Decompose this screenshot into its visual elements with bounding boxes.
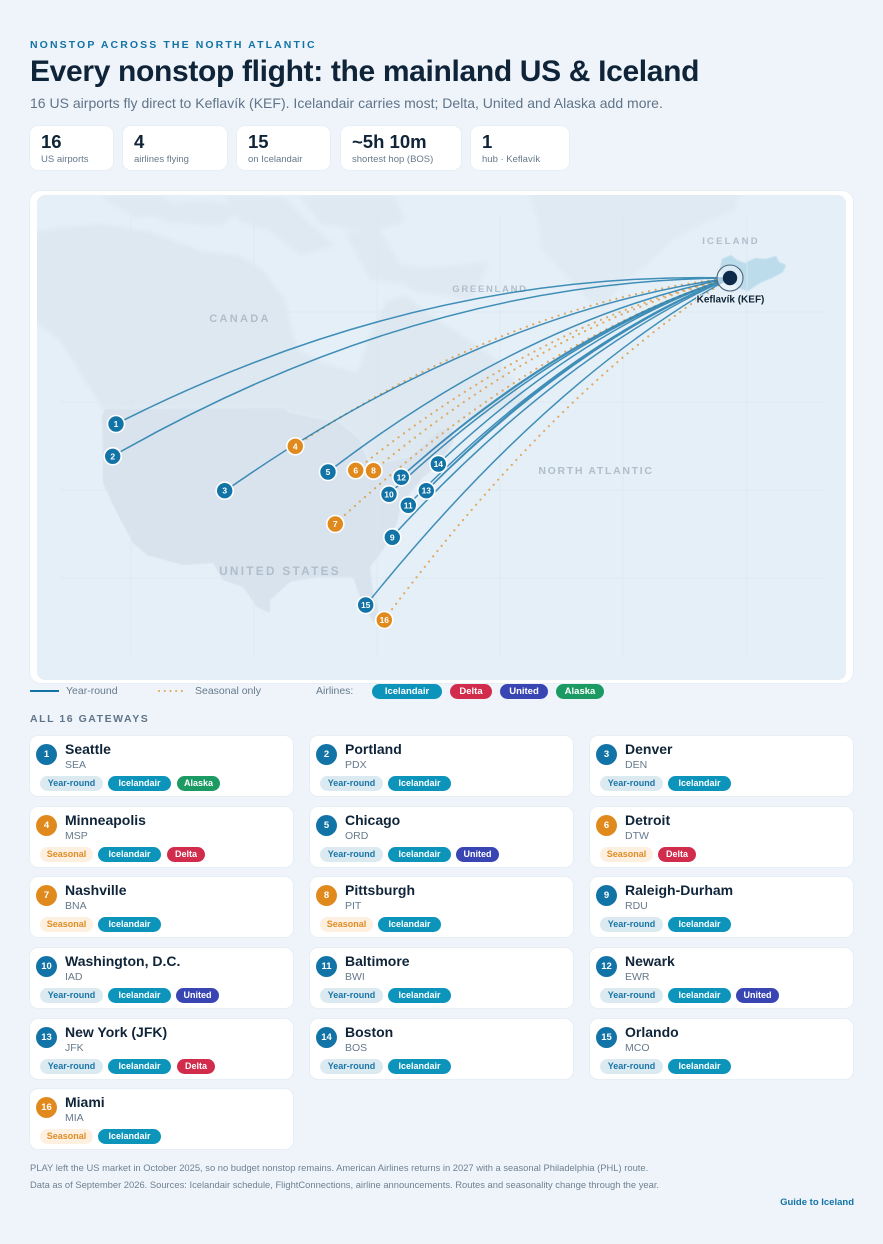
card: New York (JFK): New York (JFK) [65,1024,167,1040]
card: Seattle: 1 [44,749,49,760]
card: Detroit: DTW [625,830,649,842]
legend pill: Delta: Delta [459,686,483,697]
card: Seattle [29,735,294,797]
Keflavík hub marker [697,265,764,306]
card: Portland: 2 [324,749,329,760]
card: Detroit: Seasonal [607,849,646,859]
marker numbers: 4 [293,441,298,451]
card: Portland [309,735,574,797]
stat: shortest hop: ~5h 10m [352,131,427,152]
card: Miami: Icelandair [108,1131,151,1141]
legend: seasonal dots [158,690,183,692]
card: Raleigh-Durham [589,876,854,938]
card: Nashville [29,876,294,938]
card: Seattle: Seattle [65,741,111,757]
footnote: PLAY left the US market in October 2025, so no budget nonstop remains. American Airlines returns in 2027 with a seasonal Philadelphia (PHL) route. [30,1162,648,1173]
card: Seattle: Icelandair [118,778,161,788]
card: Baltimore: 11 [321,961,332,972]
card: Baltimore: Baltimore [345,953,410,969]
card: Denver: Denver [625,741,672,757]
year-round routes [113,278,730,605]
marker 7 Nashville [327,516,344,532]
card: Pittsburgh: 8 [324,890,329,901]
card: Portland: Icelandair [398,778,441,788]
card: Chicago: United [464,849,492,859]
region labels: GREENLAND [452,284,528,295]
footnote [30,1162,659,1190]
region labels: ICELAND [702,236,760,247]
eyebrow: NONSTOP ACROSS THE NORTH ATLANTIC [30,39,317,51]
card: Miami [29,1088,294,1150]
marker 5 Chicago [320,464,336,480]
legend: year-round label: Year-round [66,685,118,697]
marker numbers: 3 [222,486,227,496]
marker numbers: 9 [390,532,395,542]
marker 12 Newark [393,469,410,486]
card: Denver [589,735,854,797]
card: Minneapolis: Delta [175,849,197,859]
card: Nashville: BNA [65,900,87,912]
card: Seattle: Alaska [184,778,213,788]
card: Baltimore: Icelandair [398,990,441,1000]
card: Washington, D.C.: United [184,990,212,1000]
region labels [209,236,760,578]
marker 14 Boston [430,456,447,472]
card: Washington, D.C.: Icelandair [118,990,161,1000]
footnote: Data as of September 2026. Sources: Icelandair schedule, FlightConnections, airline announcements. Routes and seasonality change through the year. [30,1178,659,1190]
card: Detroit: 6 [604,820,609,831]
card: Minneapolis [29,806,294,868]
panel: route map [29,190,854,684]
card: Newark: Year-round [608,990,655,1000]
card: Pittsburgh: PIT [345,900,361,912]
card: Minneapolis: MSP [65,830,88,842]
card: Baltimore: BWI [345,971,365,983]
land: United States [102,408,453,622]
card: Newark: United [744,990,772,1000]
card: Denver: Icelandair [678,778,721,788]
stat: US airports: 16 [41,131,62,152]
card: Orlando: 15 [601,1032,612,1043]
marker 13 New York [418,482,435,499]
card: New York (JFK): Icelandair [118,1061,161,1071]
stat: airlines flying: 4 [134,131,144,152]
marker numbers: 14 [434,459,443,469]
marker numbers [110,419,443,625]
card: Newark: 12 [601,961,612,972]
marker numbers: 10 [384,489,394,499]
card: Raleigh-Durham: RDU [625,900,648,912]
card: Baltimore: Year-round [328,990,375,1000]
section heading: ALL 16 GATEWAYS [30,713,149,725]
card: Nashville: Nashville [65,882,126,898]
card: New York (JFK) [29,1018,294,1080]
region labels: NORTH ATLANTIC [538,465,654,477]
legend: year-round line [30,690,59,692]
card: Raleigh-Durham: Year-round [608,919,655,929]
marker 4 Minneapolis [287,438,304,455]
marker numbers: 5 [326,467,331,477]
card: Minneapolis: Seasonal [47,849,86,859]
card: Boston [309,1018,574,1080]
stat: hub: 1 [482,131,492,152]
legend: seasonal label: Seasonal only [195,685,261,697]
map background [30,192,846,680]
legend pill: Delta [450,684,492,699]
card: Chicago: Icelandair [398,849,441,859]
marker 11 Baltimore [400,497,417,514]
marker 8 Pittsburgh [365,462,382,479]
card: Detroit: Delta [666,849,688,859]
stat: shortest hop [340,125,462,171]
card: Pittsburgh: Icelandair [388,919,431,929]
card: Portland: PDX [345,759,367,771]
card: Boston: BOS [345,1042,367,1054]
subtitle: 16 US airports fly direct to Keflavík (KEF). Icelandair carries most; Delta, United and Alaska add more. [30,95,663,111]
card: Orlando [589,1018,854,1080]
card: Nashville: Seasonal [47,919,86,929]
card: Denver: DEN [625,759,647,771]
card: Pittsburgh [309,876,574,938]
card: Miami: 16 [41,1102,52,1113]
land: Arctic islands [100,196,490,300]
land: Greenland [528,192,740,308]
card: Boston: Year-round [328,1061,375,1071]
card: Newark: Icelandair [678,990,721,1000]
stat: hub [470,125,570,171]
stat: airlines flying [122,125,228,171]
marker numbers: 16 [380,615,389,625]
card: Newark [589,947,854,1009]
card: Orlando: MCO [625,1042,650,1054]
card: Baltimore [309,947,574,1009]
marker 10 Washington [380,486,398,503]
region labels: CANADA [209,313,271,325]
land: Canada [30,224,530,467]
marker numbers: 12 [397,472,406,482]
marker numbers: 11 [404,500,413,510]
marker 6 Detroit [347,462,364,479]
card: Miami: MIA [65,1112,84,1124]
card: Orlando: Orlando [625,1024,679,1040]
card: Detroit [589,806,854,868]
legend pill: Alaska: Alaska [565,686,595,697]
marker numbers: 7 [333,519,338,529]
card: Orlando: Year-round [608,1061,655,1071]
card: New York (JFK): JFK [65,1042,84,1054]
card: Raleigh-Durham: 9 [604,890,609,901]
marker 3 Denver [216,482,233,499]
marker 16 Miami [376,612,393,628]
card: Nashville: 7 [44,890,49,901]
seasonal routes [295,278,730,620]
card: Chicago: 5 [324,820,329,831]
land: Iceland [720,255,786,291]
card: Portland: Portland [345,741,402,757]
marker 2 Portland [104,448,121,465]
card: Washington, D.C.: Washington, D.C. [65,953,180,969]
card: Raleigh-Durham: Icelandair [678,919,721,929]
card: Seattle: SEA [65,759,86,771]
card: New York (JFK): Year-round [48,1061,95,1071]
marker numbers: 13 [422,486,431,496]
card: Minneapolis: 4 [44,820,49,831]
route map [37,195,846,680]
card: New York (JFK): Delta [185,1061,207,1071]
stat: US airports [29,125,114,171]
card: Minneapolis: Icelandair [108,849,151,859]
card: Denver: 3 [604,749,609,760]
card: Raleigh-Durham: Raleigh-Durham [625,882,733,898]
marker numbers: 2 [110,451,115,461]
marker numbers: 8 [371,466,376,476]
legend pill: Alaska [556,684,604,699]
card: Miami: Seasonal [47,1131,86,1141]
card: Pittsburgh: Seasonal [327,919,366,929]
region labels: UNITED STATES [219,564,341,578]
stat: US airports: US airports [41,154,89,165]
card: Chicago: Year-round [328,849,375,859]
card: Chicago: Chicago [345,812,400,828]
card: New York (JFK): 13 [41,1032,52,1043]
grid lines [746,262,748,290]
card: Pittsburgh: Pittsburgh [345,882,415,898]
card: Seattle: Year-round [48,778,95,788]
card: Washington, D.C. [29,947,294,1009]
stat: hub: hub · Keflavík [482,154,540,165]
airport markers [104,416,447,628]
stat: shortest hop: shortest hop (BOS) [352,154,433,165]
card: Chicago: ORD [345,830,368,842]
legend pill: Icelandair: Icelandair [385,686,429,697]
marker 1 Seattle [108,416,124,432]
legend pill: Icelandair [372,684,442,699]
card: Detroit: Detroit [625,812,670,828]
card: Boston: 14 [321,1032,332,1043]
credit: Guide to Iceland [780,1197,854,1208]
card: Chicago [309,806,574,868]
card: Newark: Newark [625,953,675,969]
card: Washington, D.C.: 10 [41,961,52,972]
marker 15 Orlando [357,596,374,614]
card: Boston: Icelandair [398,1061,441,1071]
marker 9 Raleigh-Durham [384,529,401,546]
Keflavík hub marker: Keflavík (KEF) [697,294,764,306]
legend pill: United [500,684,548,699]
card: Washington, D.C.: Year-round [48,990,95,1000]
card: Boston: Boston [345,1024,393,1040]
title: Every nonstop flight: the mainland US & Iceland [30,55,699,88]
marker numbers: 6 [353,465,358,475]
stat: on Icelandair: on Icelandair [248,154,302,165]
stat: airlines flying: airlines flying [134,154,189,165]
marker numbers: 15 [361,600,371,610]
stat: on Icelandair: 15 [248,131,269,152]
stat: on Icelandair [236,125,331,171]
card: Orlando: Icelandair [678,1061,721,1071]
card: Washington, D.C.: IAD [65,971,83,983]
legend pill: United: United [509,686,539,697]
legend: airlines label: Airlines: [316,685,353,697]
card: Newark: EWR [625,971,650,983]
card: Minneapolis: Minneapolis [65,812,146,828]
marker numbers: 1 [114,419,119,429]
card: Miami: Miami [65,1094,105,1110]
card: Nashville: Icelandair [108,919,151,929]
card: Portland: Year-round [328,778,375,788]
card: Denver: Year-round [608,778,655,788]
